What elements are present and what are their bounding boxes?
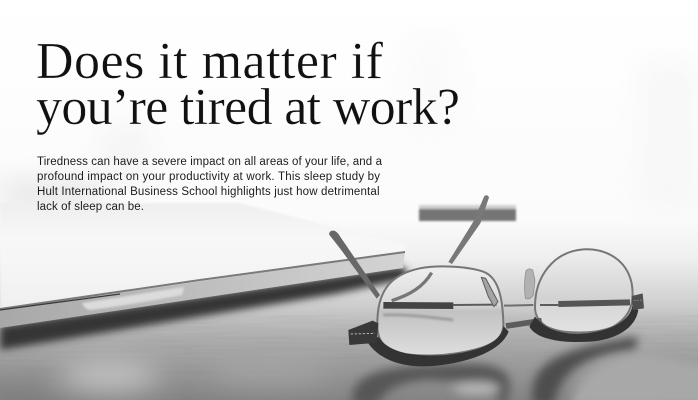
- laptop notch: [82, 287, 184, 310]
- intro text block: Tiredness can have a severe impact on all areas of your life, and a: [37, 156, 383, 168]
- right temple arm: [448, 195, 489, 264]
- bottom frame left: [368, 326, 509, 366]
- right hinge: [632, 293, 644, 310]
- intro text block: profound impact on your productivity at work. This sleep study by: [37, 171, 380, 183]
- laptop base: [0, 252, 405, 328]
- desk reflections: [352, 337, 698, 400]
- left lens: [377, 266, 503, 356]
- icon: reading glasses: [329, 195, 698, 400]
- left hinge: [348, 321, 378, 345]
- title: Does it matter if: [36, 33, 384, 90]
- laptop shadow: [0, 266, 410, 350]
- blurred background shapes: [0, 30, 698, 210]
- desk wood grain: [0, 315, 698, 400]
- intro text block: [37, 156, 383, 213]
- title: you’re tired at work?: [36, 79, 460, 136]
- intro text block: lack of sleep can be.: [37, 201, 144, 213]
- bridge: [504, 302, 533, 309]
- right lens: [535, 249, 633, 333]
- intro text block: Hult International Business School highlights just how detrimental: [37, 186, 380, 198]
- left temple arm: [329, 231, 380, 299]
- nose pad left: [481, 277, 498, 307]
- calculator: [419, 205, 516, 221]
- nose pad right: [524, 269, 535, 299]
- laptop lid: [0, 203, 405, 309]
- laptop seam: [0, 252, 405, 309]
- bottom frame right: [529, 306, 638, 342]
- arm seen through lenses: [392, 273, 432, 301]
- title: [36, 33, 460, 136]
- desk highlight: [0, 360, 698, 400]
